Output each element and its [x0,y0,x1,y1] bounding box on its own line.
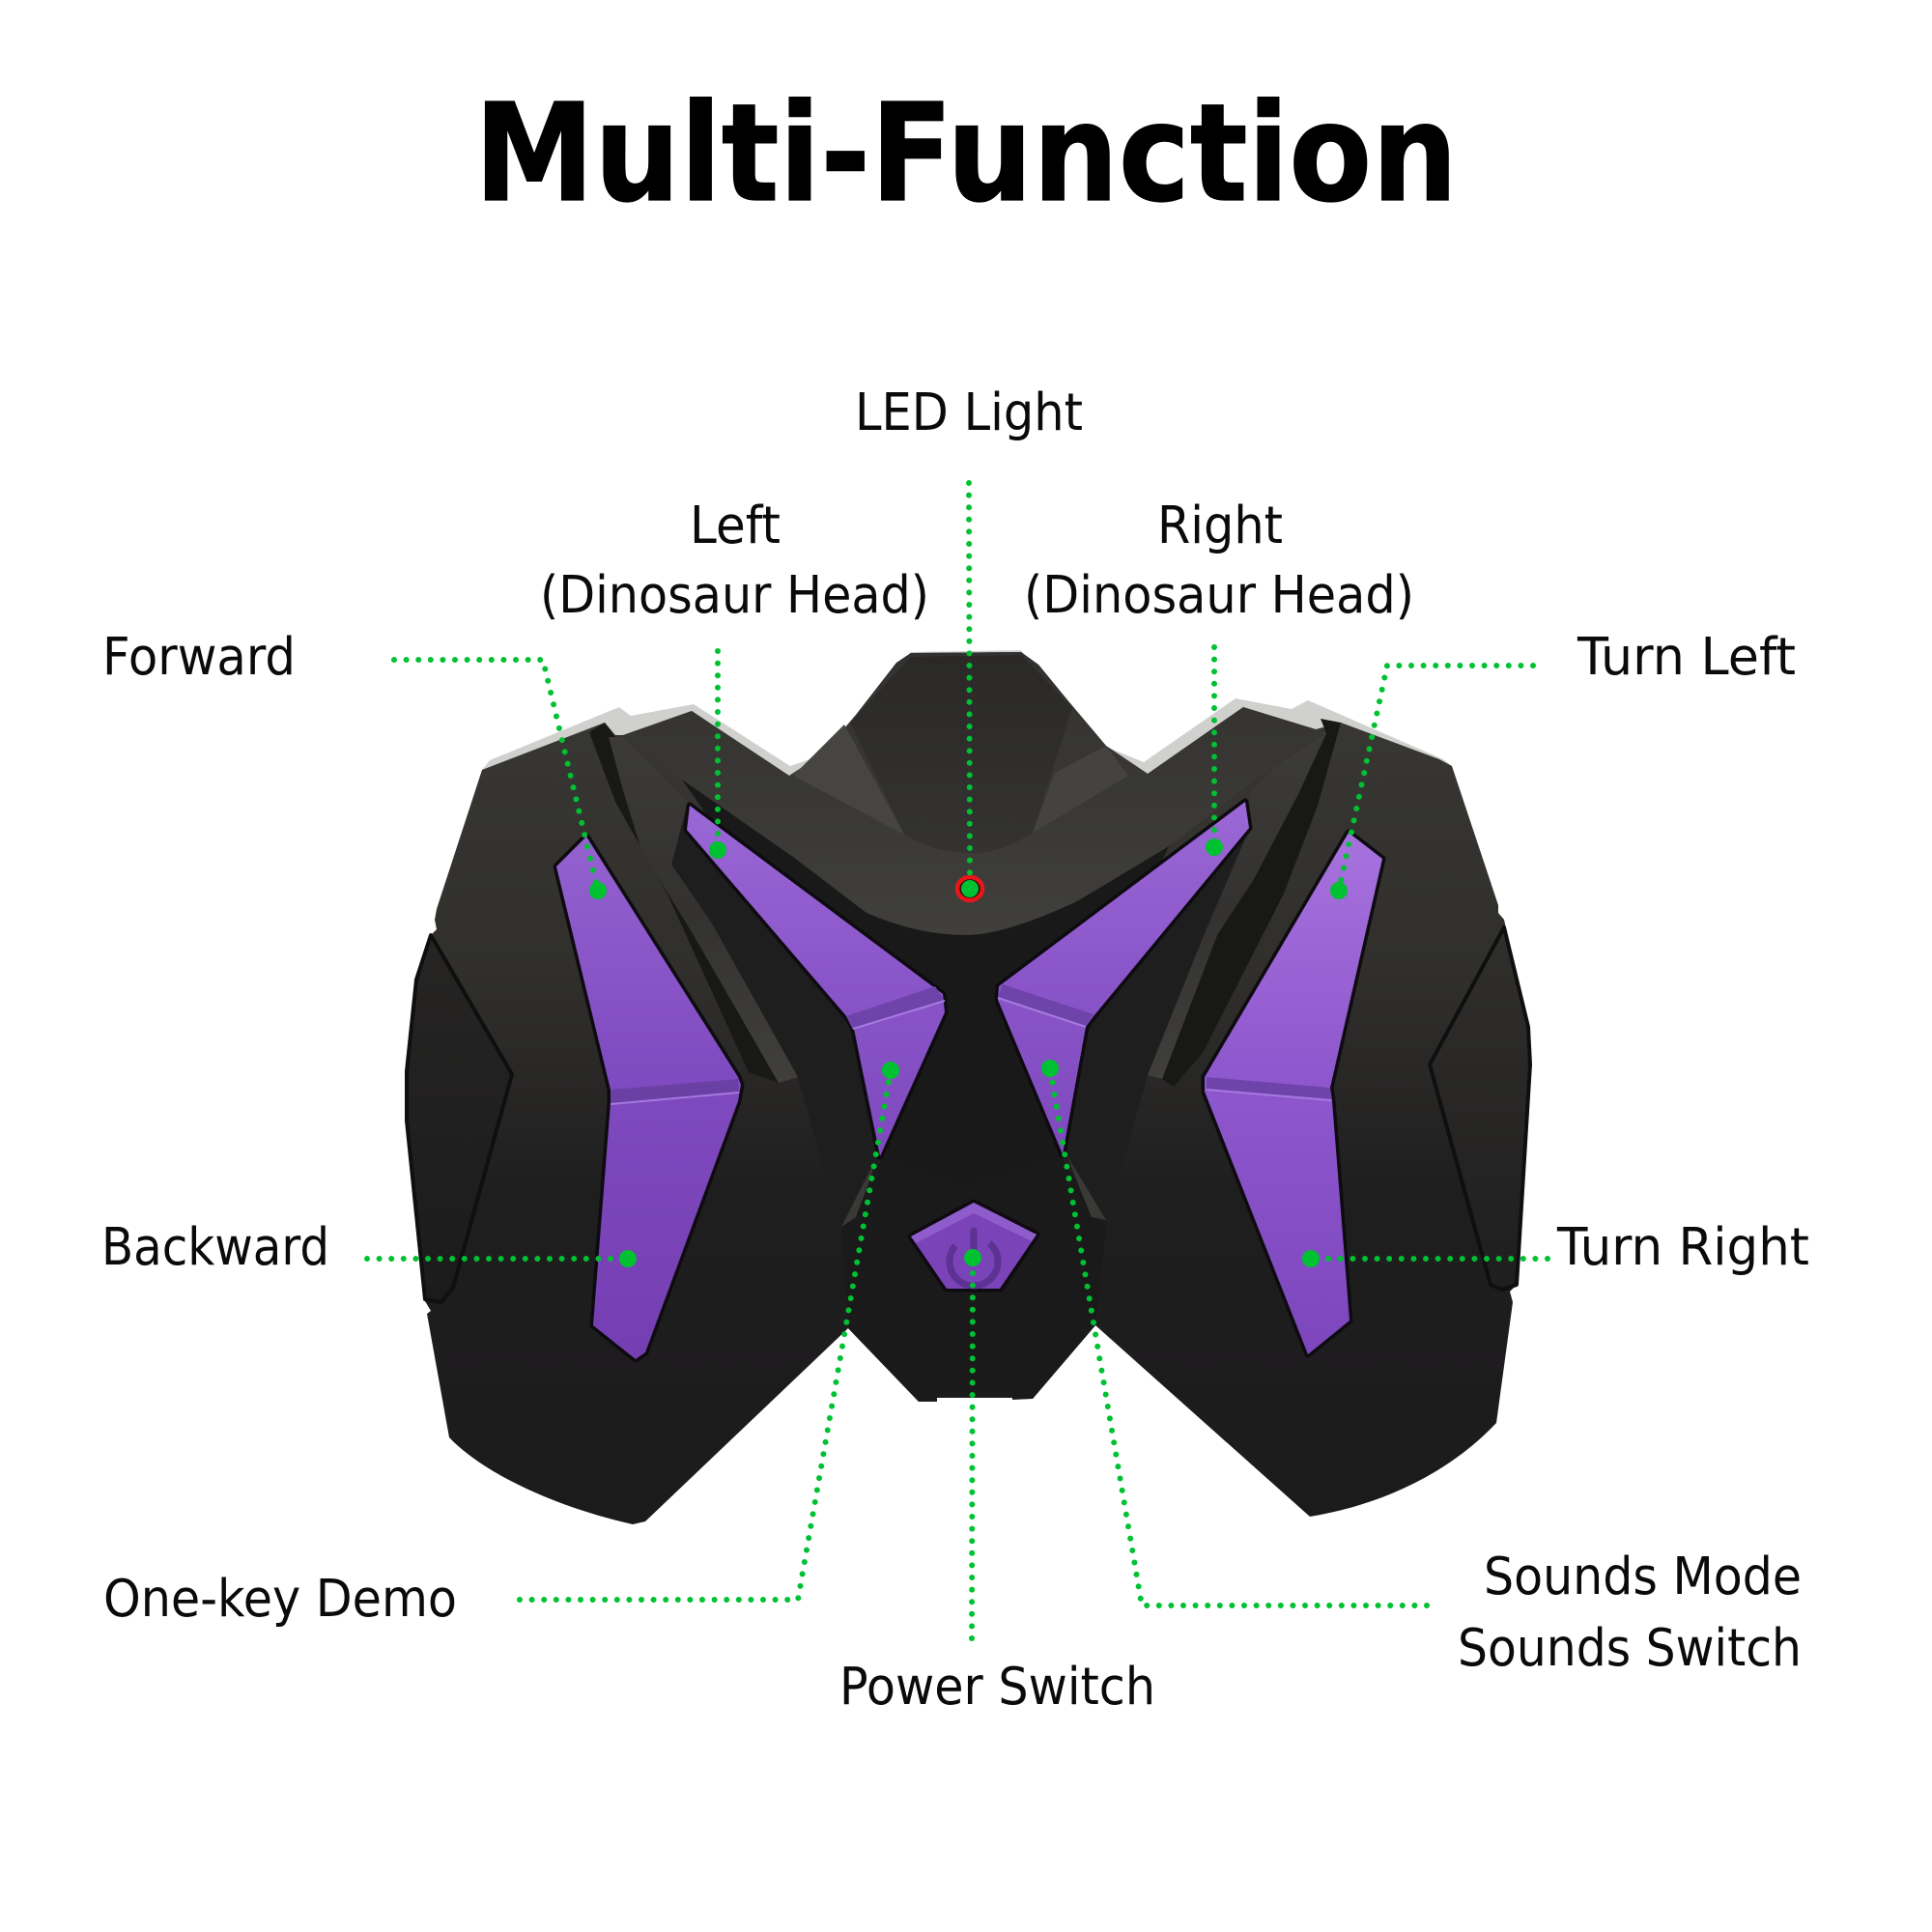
label: Sounds Mode and Sounds Switch: Sounds Mode [1484,1546,1802,1606]
right dark groove band [1162,719,1341,1087]
leader: one-key demo [520,1062,899,1600]
label: Right (Dinosaur Head): (Dinosaur Head) [1024,564,1414,625]
left side panel [407,935,512,1302]
label: Left (Dinosaur Head) [540,495,929,625]
leader: backward [367,1250,637,1267]
label: Turn Left: Turn Left [1577,626,1796,687]
remote control product [407,650,1530,1524]
button: right dinosaur head [998,802,1249,1154]
label: Forward: Forward [102,626,296,687]
label: Sounds Mode and Sounds Switch: Sounds Switch [1458,1617,1802,1678]
leader: turn right [1302,1250,1548,1267]
leader: power switch [964,1249,981,1638]
label: Power Switch: Power Switch [839,1656,1155,1717]
label: One-key Demo: One-key Demo [103,1568,457,1629]
left dark groove band [589,723,779,1083]
lower chevron plate [841,1156,1106,1402]
leader: turn left [1330,666,1533,899]
LED light [957,877,982,900]
label: Left (Dinosaur Head): Left [690,495,781,555]
label: Right (Dinosaur Head) [1024,495,1414,625]
button: turn left and turn right [1205,833,1382,1354]
small gray bevel left [841,1162,874,1227]
right gray strip [1148,731,1326,1079]
button: forward and backward [556,837,741,1359]
leader: right dinosaur head [1206,647,1223,856]
body outline [407,652,1530,1524]
label: Turn Right: Turn Right [1556,1216,1809,1277]
translucent top lip [482,650,1452,792]
title: Multi-Function [474,75,1458,233]
centre upper plate [623,652,1324,935]
left inner dark region [671,802,880,1227]
right inner dark region [1063,802,1247,1222]
centre dark area [682,776,1262,1186]
small gray bevel right [1067,1156,1106,1220]
label: Left (Dinosaur Head): (Dinosaur Head) [540,564,929,625]
head right facet [1033,746,1128,833]
button: left dinosaur head [687,806,945,1156]
right side panel [1430,927,1530,1290]
leader: left dinosaur head [709,651,726,859]
head centre facet [850,655,1072,853]
leader: forward [394,660,607,899]
power switch button [911,1203,1037,1295]
label: Backward: Backward [101,1216,329,1277]
leader: LED light [961,483,979,897]
head left facet [793,724,904,835]
label: Sounds Mode and Sounds Switch [1458,1546,1802,1678]
label: Right (Dinosaur Head): Right [1157,495,1283,555]
label: LED Light: LED Light [855,382,1083,442]
leader: sounds mode and switch [1041,1060,1427,1605]
left gray strip [609,737,798,1083]
